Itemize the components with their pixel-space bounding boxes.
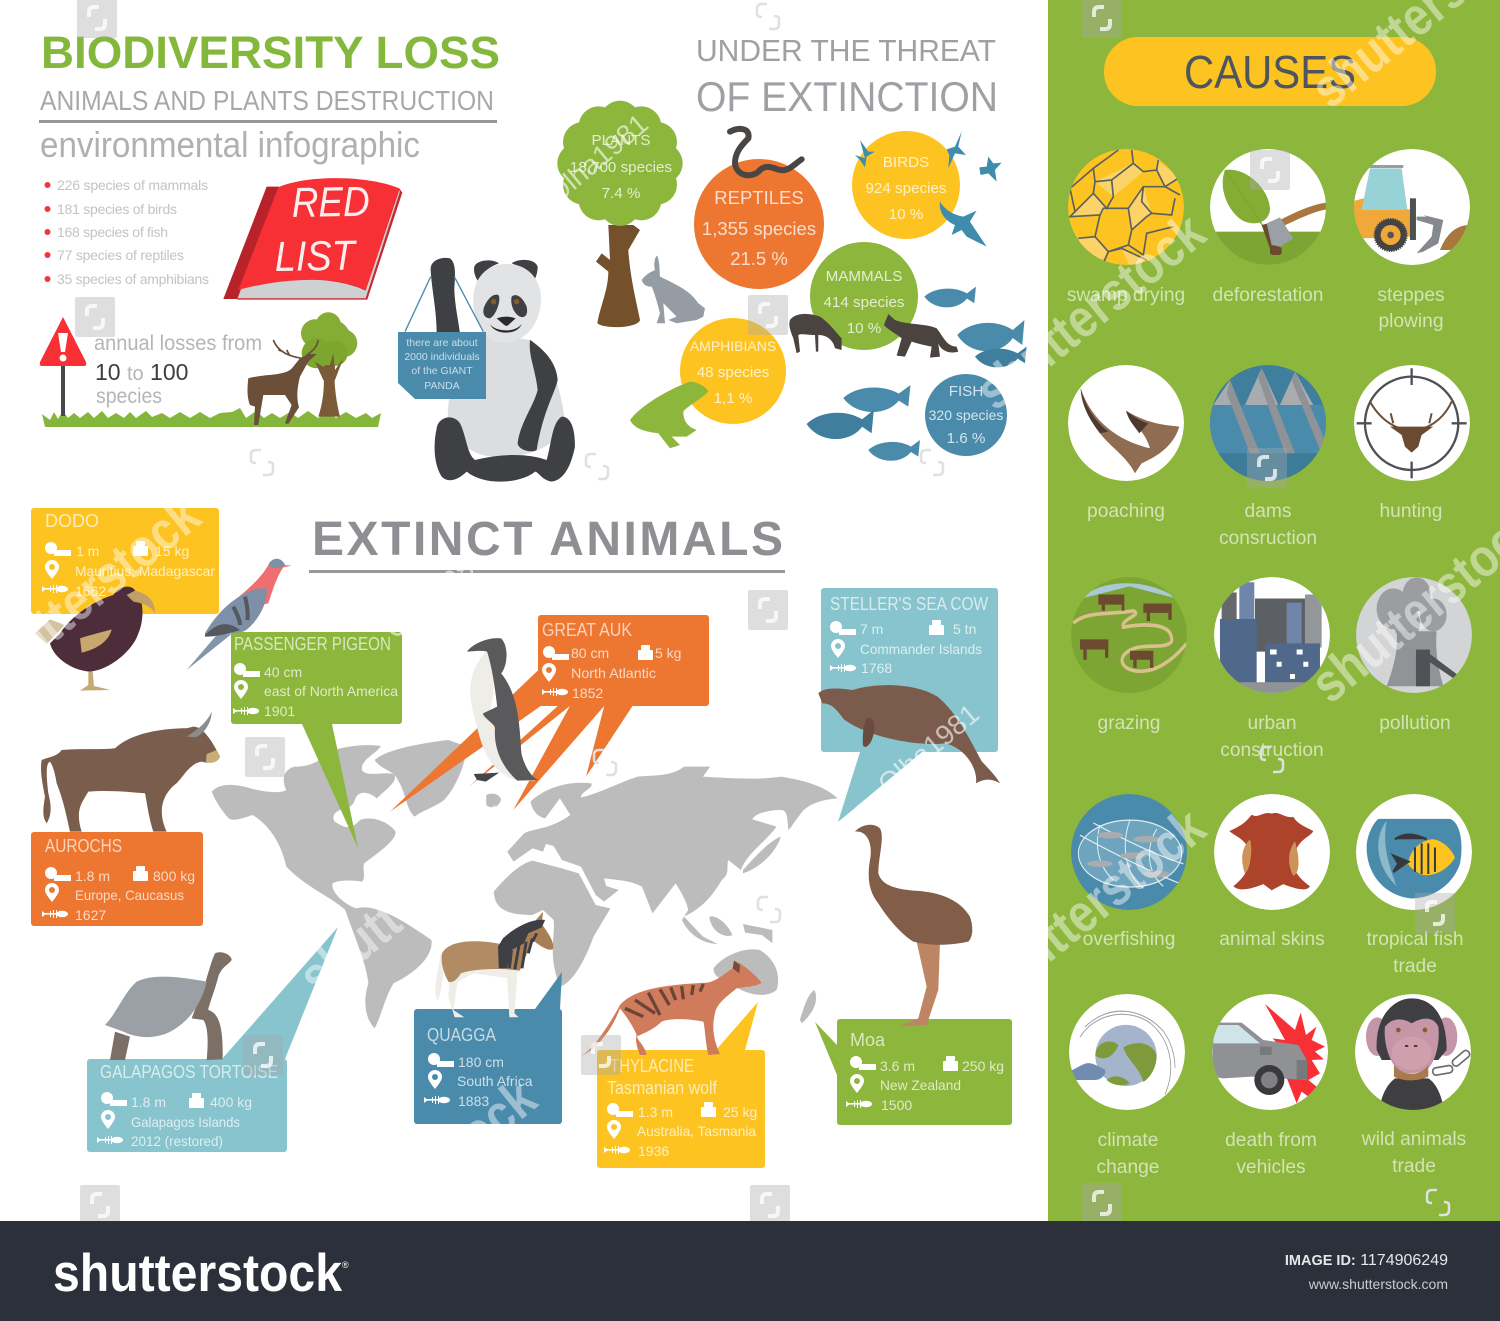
callout: thylacine (597, 1002, 765, 1168)
cause labels: steppes (1377, 285, 1445, 306)
plants tree: 18,700 species (570, 159, 672, 176)
fish circle: FISH (949, 383, 983, 400)
species bullet list: 181 species of birds (57, 201, 177, 217)
callout: aurochs: 1627 (75, 907, 106, 923)
reptiles circle: REPTILES (714, 187, 804, 208)
callout: dodo: 1662 (75, 583, 106, 599)
icon: wild animals trade (1355, 994, 1471, 1110)
footer logo: shutterstock (53, 1244, 342, 1303)
cause labels: dams (1245, 501, 1291, 522)
icon: warning sign (40, 317, 86, 416)
callout: passenger pigeon: 1901 (264, 703, 295, 719)
cause labels: tropical fish (1366, 929, 1464, 950)
footer image id: IMAGE ID: 1174906249 (1285, 1252, 1448, 1269)
cause labels: death from (1225, 1130, 1317, 1151)
footer trademark: ® (342, 1260, 349, 1270)
icon: swamp drying (1068, 149, 1184, 267)
heading: causes pill: CAUSES (1184, 46, 1356, 98)
callout: dodo: 1 m (76, 543, 99, 559)
fish circle (807, 287, 1027, 461)
callout: steller's sea cow (821, 588, 998, 822)
cause labels: plowing (1378, 311, 1444, 332)
icon: poaching (1068, 365, 1184, 481)
birds circle: BIRDS (883, 154, 929, 171)
species bullet list: 35 species of amphibians (57, 271, 209, 287)
callout: thylacine: 1936 (638, 1143, 669, 1159)
icon: red list book (223, 178, 402, 300)
icon: grazing (1071, 577, 1187, 693)
callout: moa (815, 1019, 1012, 1125)
reptiles circle: 1,355 species (702, 218, 816, 239)
watermark overlay: shutterstock (965, 201, 1217, 421)
plants tree (557, 101, 683, 327)
cause labels: consruction (1219, 528, 1317, 549)
callout: galapagos tortoise: 400 kg (210, 1094, 252, 1110)
icon: moa (855, 825, 972, 1027)
callout: galapagos tortoise (87, 927, 338, 1152)
mammals circle (789, 242, 958, 358)
annual losses block (40, 312, 381, 427)
cause labels: swamp drying (1067, 285, 1185, 306)
species bullet list: 77 species of reptiles (57, 247, 184, 263)
icon: death from vehicles (1212, 994, 1328, 1110)
mammals circle: 10 % (847, 320, 881, 337)
heading: extinct animals: EXTINCT ANIMALS (312, 513, 783, 566)
callout: steller's sea cow: 1768 (861, 660, 892, 676)
icon: sea cow (818, 685, 1000, 783)
callout: great auk (390, 615, 709, 812)
sign: 2000 individuals (404, 351, 480, 363)
icon: passenger pigeon (187, 559, 292, 670)
mammals circle: MAMMALS (826, 268, 902, 285)
cause labels: urban (1247, 713, 1297, 734)
text: annual losses: annual losses from (94, 332, 262, 355)
callout: great auk: GREAT AUK (542, 620, 632, 640)
heading: causes pill (1104, 37, 1436, 106)
text: annual losses (94, 332, 262, 408)
birds circle: 924 species (865, 180, 947, 197)
icon: grass strip (42, 408, 381, 427)
callout: dodo: Mauritius, Madagascar (75, 563, 215, 579)
callout: quagga: 180 cm (458, 1054, 504, 1070)
icon: dams construction (1207, 365, 1330, 483)
callout: steller's sea cow: STELLER'S SEA COW (830, 594, 988, 614)
text: annual losses: species (96, 385, 162, 408)
callout: great auk: 1852 (572, 685, 603, 701)
sign: PANDA (424, 380, 460, 392)
callout: passenger pigeon (231, 632, 402, 848)
cause labels: hunting (1380, 501, 1442, 522)
icon: deforestation (1207, 149, 1330, 268)
text: annual losses: 10 to 100 (95, 359, 188, 385)
icon: thylacine (582, 961, 762, 1056)
icon: aurochs (41, 712, 220, 832)
callout: quagga: 1883 (458, 1093, 489, 1109)
icon: flying birds (855, 132, 1002, 247)
title block (39, 27, 500, 165)
mammals circle: 414 species (823, 294, 905, 311)
callout: aurochs: 1.8 m (75, 868, 110, 884)
icon: quagga (435, 912, 553, 1017)
heading: under the threat of extinction: UNDER THE THREAT (696, 33, 996, 68)
icon: animal skins (1214, 794, 1330, 910)
heading: biodiversity loss: BIODIVERSITY LOSS (41, 27, 500, 78)
cause labels: climate (1098, 1130, 1158, 1151)
world map (212, 740, 838, 1028)
callout: great auk: 80 cm (571, 645, 609, 661)
panel: causes (1048, 0, 1500, 1221)
author watermark overlay: Olha1981 (872, 698, 985, 800)
icon: giant panda with sign (398, 258, 575, 482)
cause labels: wild animals (1361, 1129, 1466, 1150)
icon: tree and deer (247, 312, 357, 425)
callout: dodo: DODO (45, 511, 99, 531)
icon: steppes plowing (1352, 149, 1470, 265)
threatened species group (557, 101, 1027, 461)
callout: passenger pigeon: PASSENGER PIGEON (234, 634, 391, 654)
heading: under the threat of extinction: OF EXTINCTION (696, 73, 998, 120)
amphibians circle: AMPHIBIANS (690, 338, 776, 354)
author watermark overlay: Olha1981 (541, 108, 654, 210)
fish circle: 320 species (929, 407, 1003, 423)
callout: moa: Moa (850, 1030, 886, 1050)
callout: thylacine: Australia, Tasmania (637, 1123, 756, 1139)
callout: aurochs (31, 832, 203, 926)
species bullet list: 168 species of fish (57, 224, 168, 240)
callout: galapagos tortoise: 2012 (restored) (131, 1133, 223, 1149)
sign: there are about (406, 337, 478, 349)
callout: dodo: 15 kg (155, 543, 189, 559)
callout: quagga: QUAGGA (427, 1025, 496, 1045)
cause labels (1067, 285, 1466, 1178)
icon: mammals (789, 314, 958, 358)
callout: thylacine: 25 kg (723, 1104, 757, 1120)
subheading: animals and plants destruction: ANIMALS AND PLANTS DESTRUCTION (40, 85, 494, 116)
callout: moa: 3.6 m (880, 1058, 915, 1074)
callout: thylacine: 1.3 m (638, 1104, 673, 1120)
plants tree: 7.4 % (602, 185, 640, 202)
callout: moa: New Zealand (880, 1077, 961, 1093)
callout: moa: 1500 (881, 1097, 912, 1113)
amphibians circle: 48 species (697, 364, 770, 381)
callout: aurochs: Europe, Caucasus (75, 887, 184, 903)
icon: urban construction (1213, 577, 1330, 694)
cause labels: pollution (1379, 713, 1451, 734)
callout: galapagos tortoise: 1.8 m (131, 1094, 166, 1110)
icon: climate change (1065, 994, 1185, 1110)
icon: overfishing (1071, 794, 1187, 910)
icon: frog (630, 382, 708, 448)
birds circle (852, 131, 1002, 247)
callout: great auk: 5 kg (655, 645, 681, 661)
watermark overlay: shutterstock (296, 1067, 548, 1287)
cause labels: construction (1220, 740, 1324, 761)
cause labels: animal skins (1219, 929, 1325, 950)
callout: passenger pigeon: east of North America (264, 683, 398, 699)
cause labels: deforestation (1213, 285, 1323, 306)
species bullet list: 226 species of mammals (57, 177, 208, 193)
cause labels: trade (1393, 956, 1437, 977)
icon: red list book: LIST (274, 232, 358, 280)
callout: passenger pigeon: 40 cm (264, 664, 302, 680)
species bullet list (44, 177, 209, 287)
callout: galapagos tortoise: Galapagos Islands (131, 1114, 240, 1130)
icon: pollution (1356, 577, 1472, 693)
callout: thylacine: Tasmanian wolf (607, 1078, 718, 1098)
icon: great auk (467, 638, 538, 782)
birds circle: 10 % (889, 206, 923, 223)
callout: dodo (31, 508, 219, 614)
amphibians circle (630, 318, 786, 448)
callout: aurochs: AUROCHS (45, 836, 122, 856)
watermark overlay: shutterstock (965, 796, 1217, 1016)
callout: quagga (414, 972, 562, 1124)
cause labels: grazing (1098, 713, 1160, 734)
callout: galapagos tortoise: GALAPAGOS TORTOISE (100, 1062, 278, 1082)
icon: fish (807, 287, 1027, 461)
amphibians circle: 1,1 % (714, 390, 752, 407)
callout: thylacine: THYLACINE (610, 1056, 694, 1076)
icon: tropical fish trade (1356, 794, 1472, 910)
cause labels: overfishing (1083, 929, 1175, 950)
footer url: www.shutterstock.com (1308, 1276, 1448, 1292)
callout: steller's sea cow: 7 m (860, 621, 883, 637)
plants tree: PLANTS (591, 132, 651, 149)
cause labels: trade (1392, 1156, 1436, 1177)
watermark overlay: shutterstock (288, 787, 540, 1007)
footer bar (0, 1221, 1500, 1321)
callout: great auk: North Atlantic (571, 665, 656, 681)
icon: dodo (35, 587, 155, 691)
callout: steller's sea cow: Commander Islands (860, 641, 982, 657)
reptiles circle (694, 129, 824, 289)
subheading: environmental infographic: environmental infographic (40, 124, 420, 165)
reptiles circle: 21.5 % (730, 248, 788, 269)
sign: of the GIANT (411, 365, 473, 377)
author watermark overlay (379, 108, 985, 800)
icon: red list book: RED (291, 178, 370, 226)
cause labels: poaching (1087, 501, 1165, 522)
icon: tortoise (105, 952, 232, 1060)
cause labels: change (1097, 1157, 1159, 1178)
callout: quagga: South Africa (457, 1073, 533, 1089)
author watermark overlay: Olha1981 (379, 543, 492, 645)
callout: moa: 250 kg (962, 1058, 1004, 1074)
fish circle: 1.6 % (947, 430, 985, 447)
sign (398, 332, 486, 399)
icon: hunting (1354, 365, 1470, 481)
icon: hare (642, 256, 705, 323)
cause labels: vehicles (1236, 1157, 1306, 1178)
heading: under the threat of extinction (696, 33, 998, 120)
callout: aurochs: 800 kg (153, 868, 195, 884)
callout: steller's sea cow: 5 tn (953, 621, 976, 637)
